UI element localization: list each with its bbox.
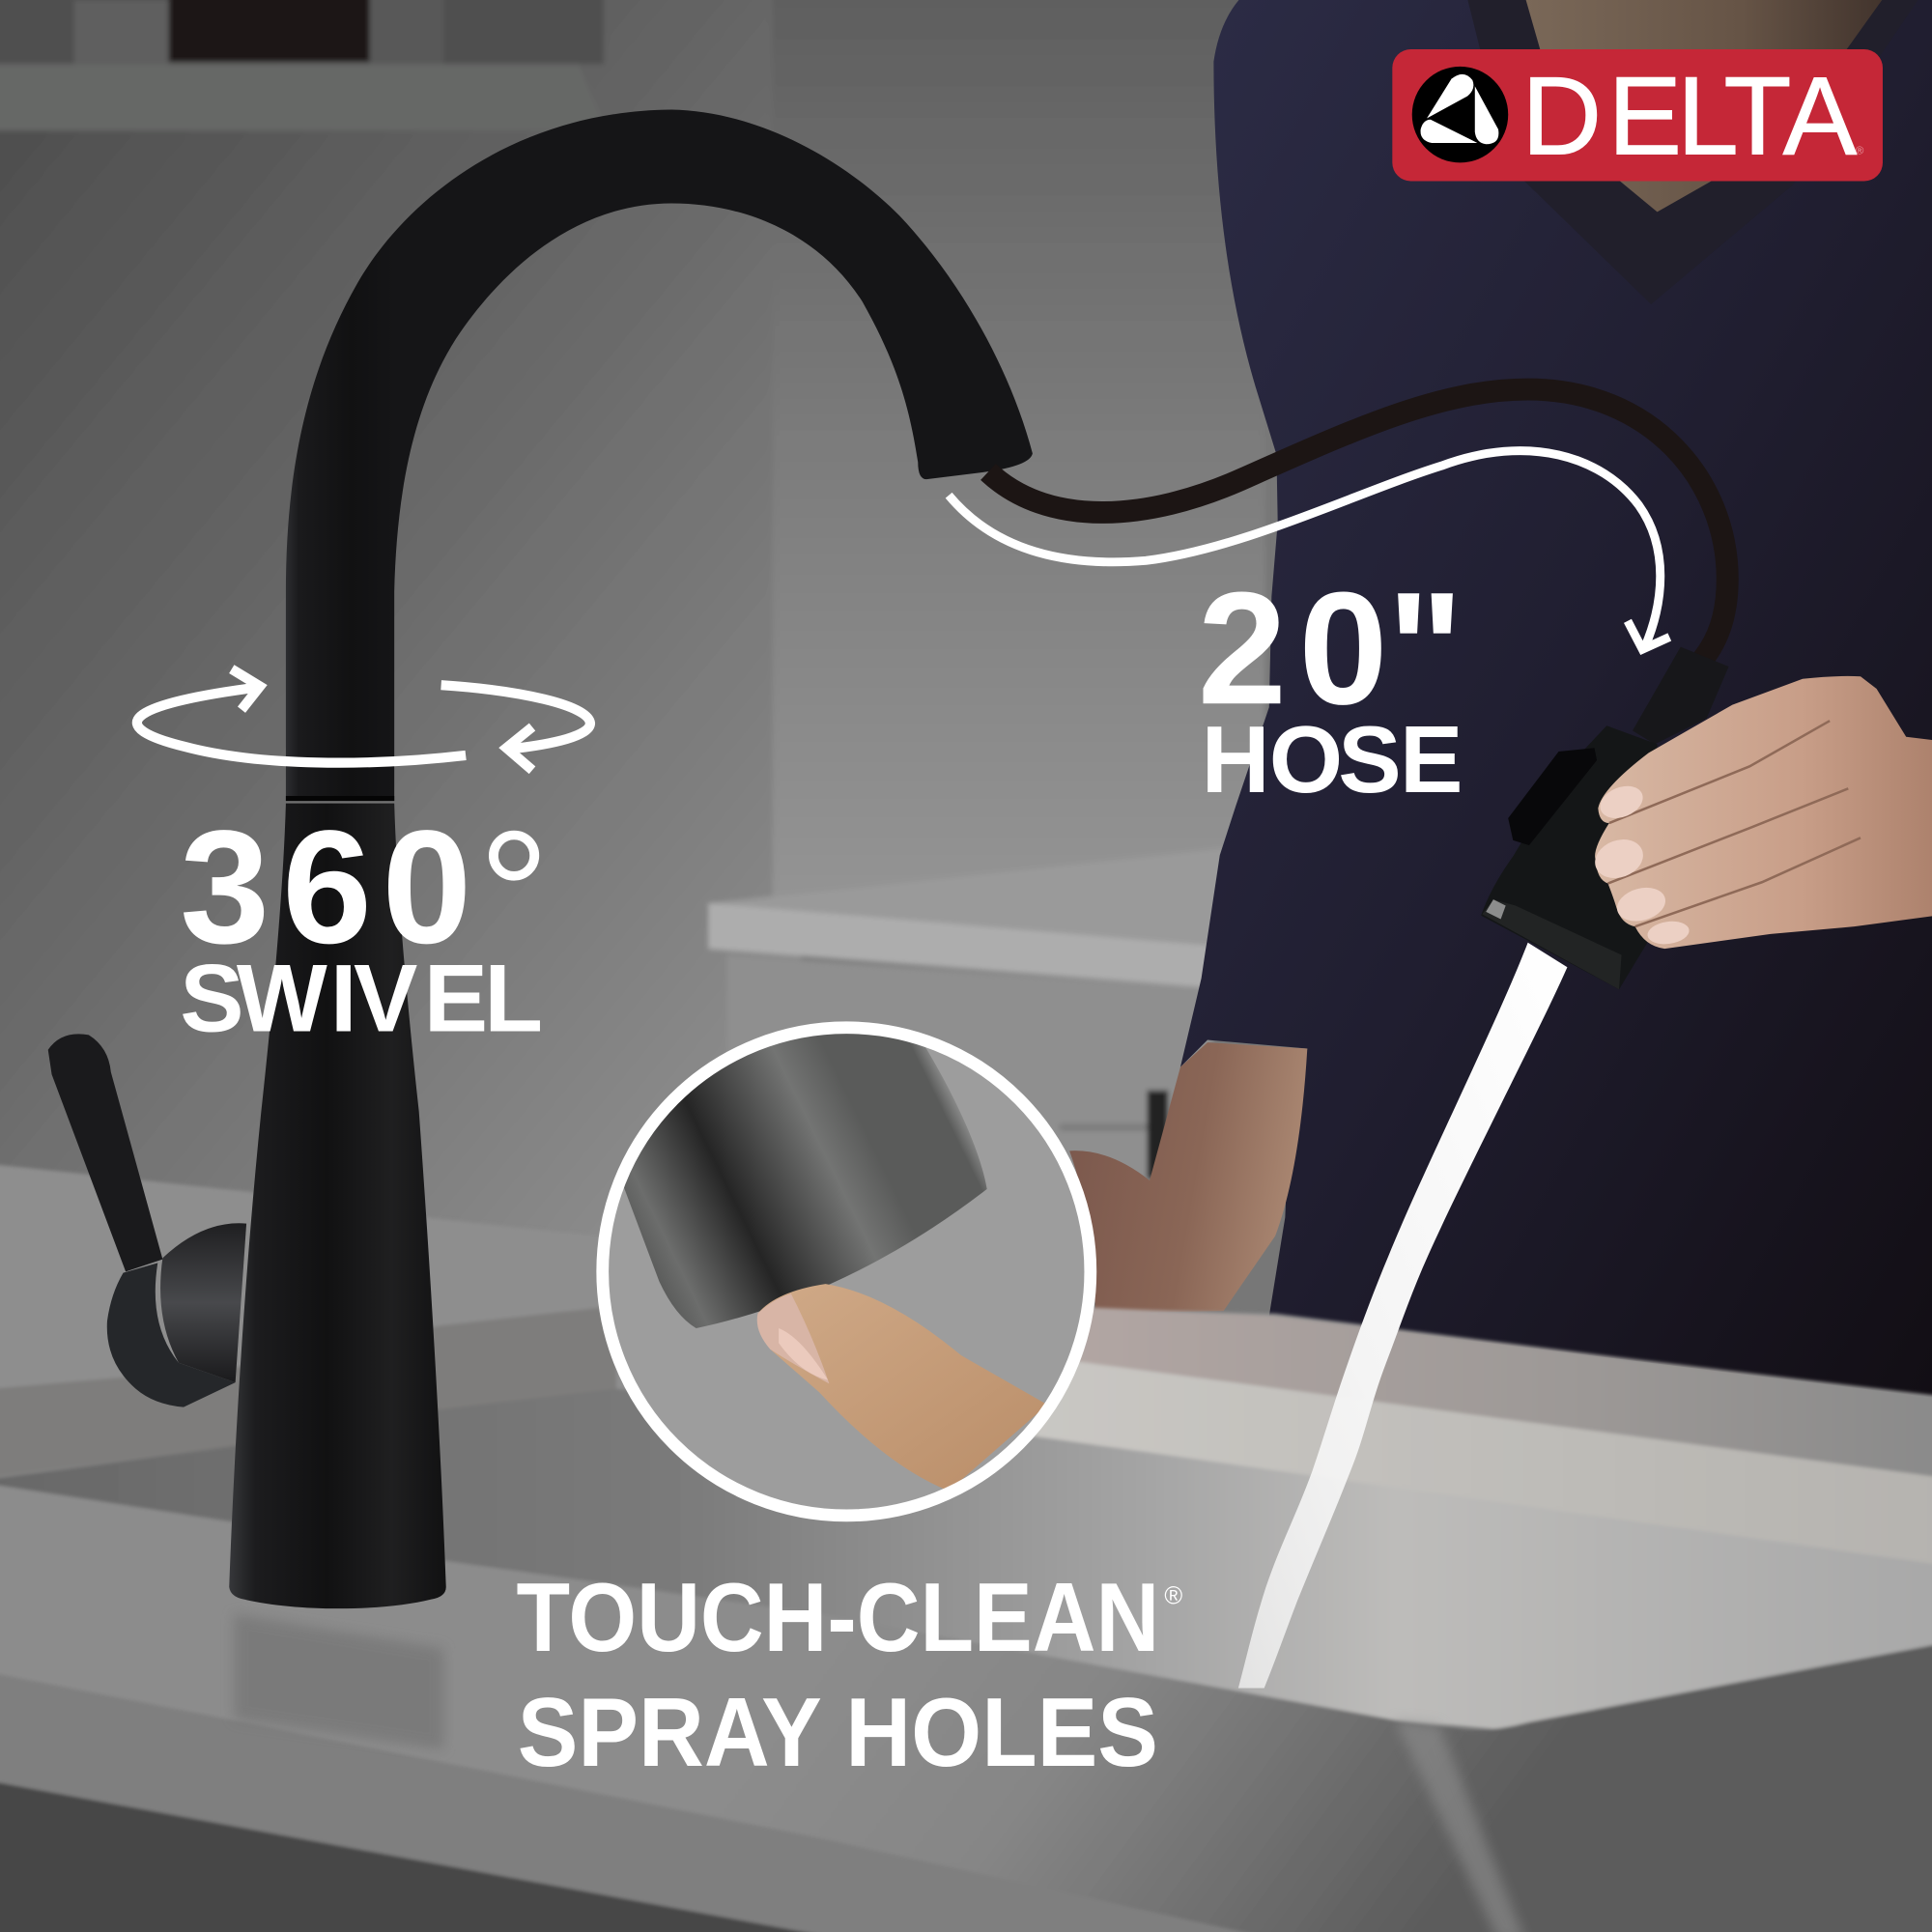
sink drain streak bbox=[1395, 1720, 1525, 1932]
arrow: hose length bbox=[949, 451, 1669, 649]
faucet tapered base bbox=[229, 796, 446, 1608]
inset: touch-clean spray holes bbox=[603, 1010, 1091, 1516]
countertop and sink bbox=[0, 1164, 1932, 1932]
inset: sprayer face bbox=[622, 1010, 987, 1328]
Delta logo: ® bbox=[1856, 145, 1864, 156]
pull-down hose bbox=[988, 389, 1727, 659]
heading: 360 swivel: SWIVEL bbox=[180, 946, 543, 1053]
heading: touch-clean spray holes: TOUCH-CLEAN bbox=[516, 1564, 1159, 1672]
heading: touch-clean spray holes: ® bbox=[1164, 1583, 1182, 1610]
faucet handle bbox=[48, 1034, 246, 1407]
inset: finger bbox=[757, 1284, 1047, 1491]
heading: touch-clean spray holes bbox=[516, 1564, 1182, 1787]
heading: touch-clean spray holes: SPRAY HOLES bbox=[518, 1679, 1158, 1787]
woman's neck and V collar bbox=[1466, 0, 1922, 304]
arrows: swivel rotation bbox=[137, 669, 590, 770]
inset: fingertip bbox=[757, 1293, 829, 1383]
woman's left forearm and hand bbox=[1069, 1042, 1307, 1314]
heading: 20 inch hose: 20" bbox=[1198, 559, 1463, 738]
heading: 360 swivel bbox=[180, 794, 550, 1053]
logo icon: triangle in black circle bbox=[1412, 67, 1508, 162]
heading: 360 swivel: ° bbox=[478, 794, 550, 995]
woman's sweater bbox=[1180, 0, 1932, 1399]
inset: fingernail bbox=[779, 1328, 828, 1380]
woman's right hand bbox=[1590, 676, 1932, 949]
Delta logo: DELTA bbox=[1521, 54, 1858, 178]
Delta logo bbox=[1392, 49, 1883, 181]
water stream bbox=[1238, 943, 1567, 1688]
sprayer head bbox=[1481, 647, 1729, 989]
heading: 20 inch hose: HOSE bbox=[1202, 706, 1463, 812]
faucet reflection on counter bbox=[234, 1614, 443, 1749]
faucet gooseneck spout bbox=[286, 110, 1033, 801]
heading: 360 swivel: 360 bbox=[180, 798, 471, 978]
background kitchen wall bbox=[0, 0, 1265, 1293]
